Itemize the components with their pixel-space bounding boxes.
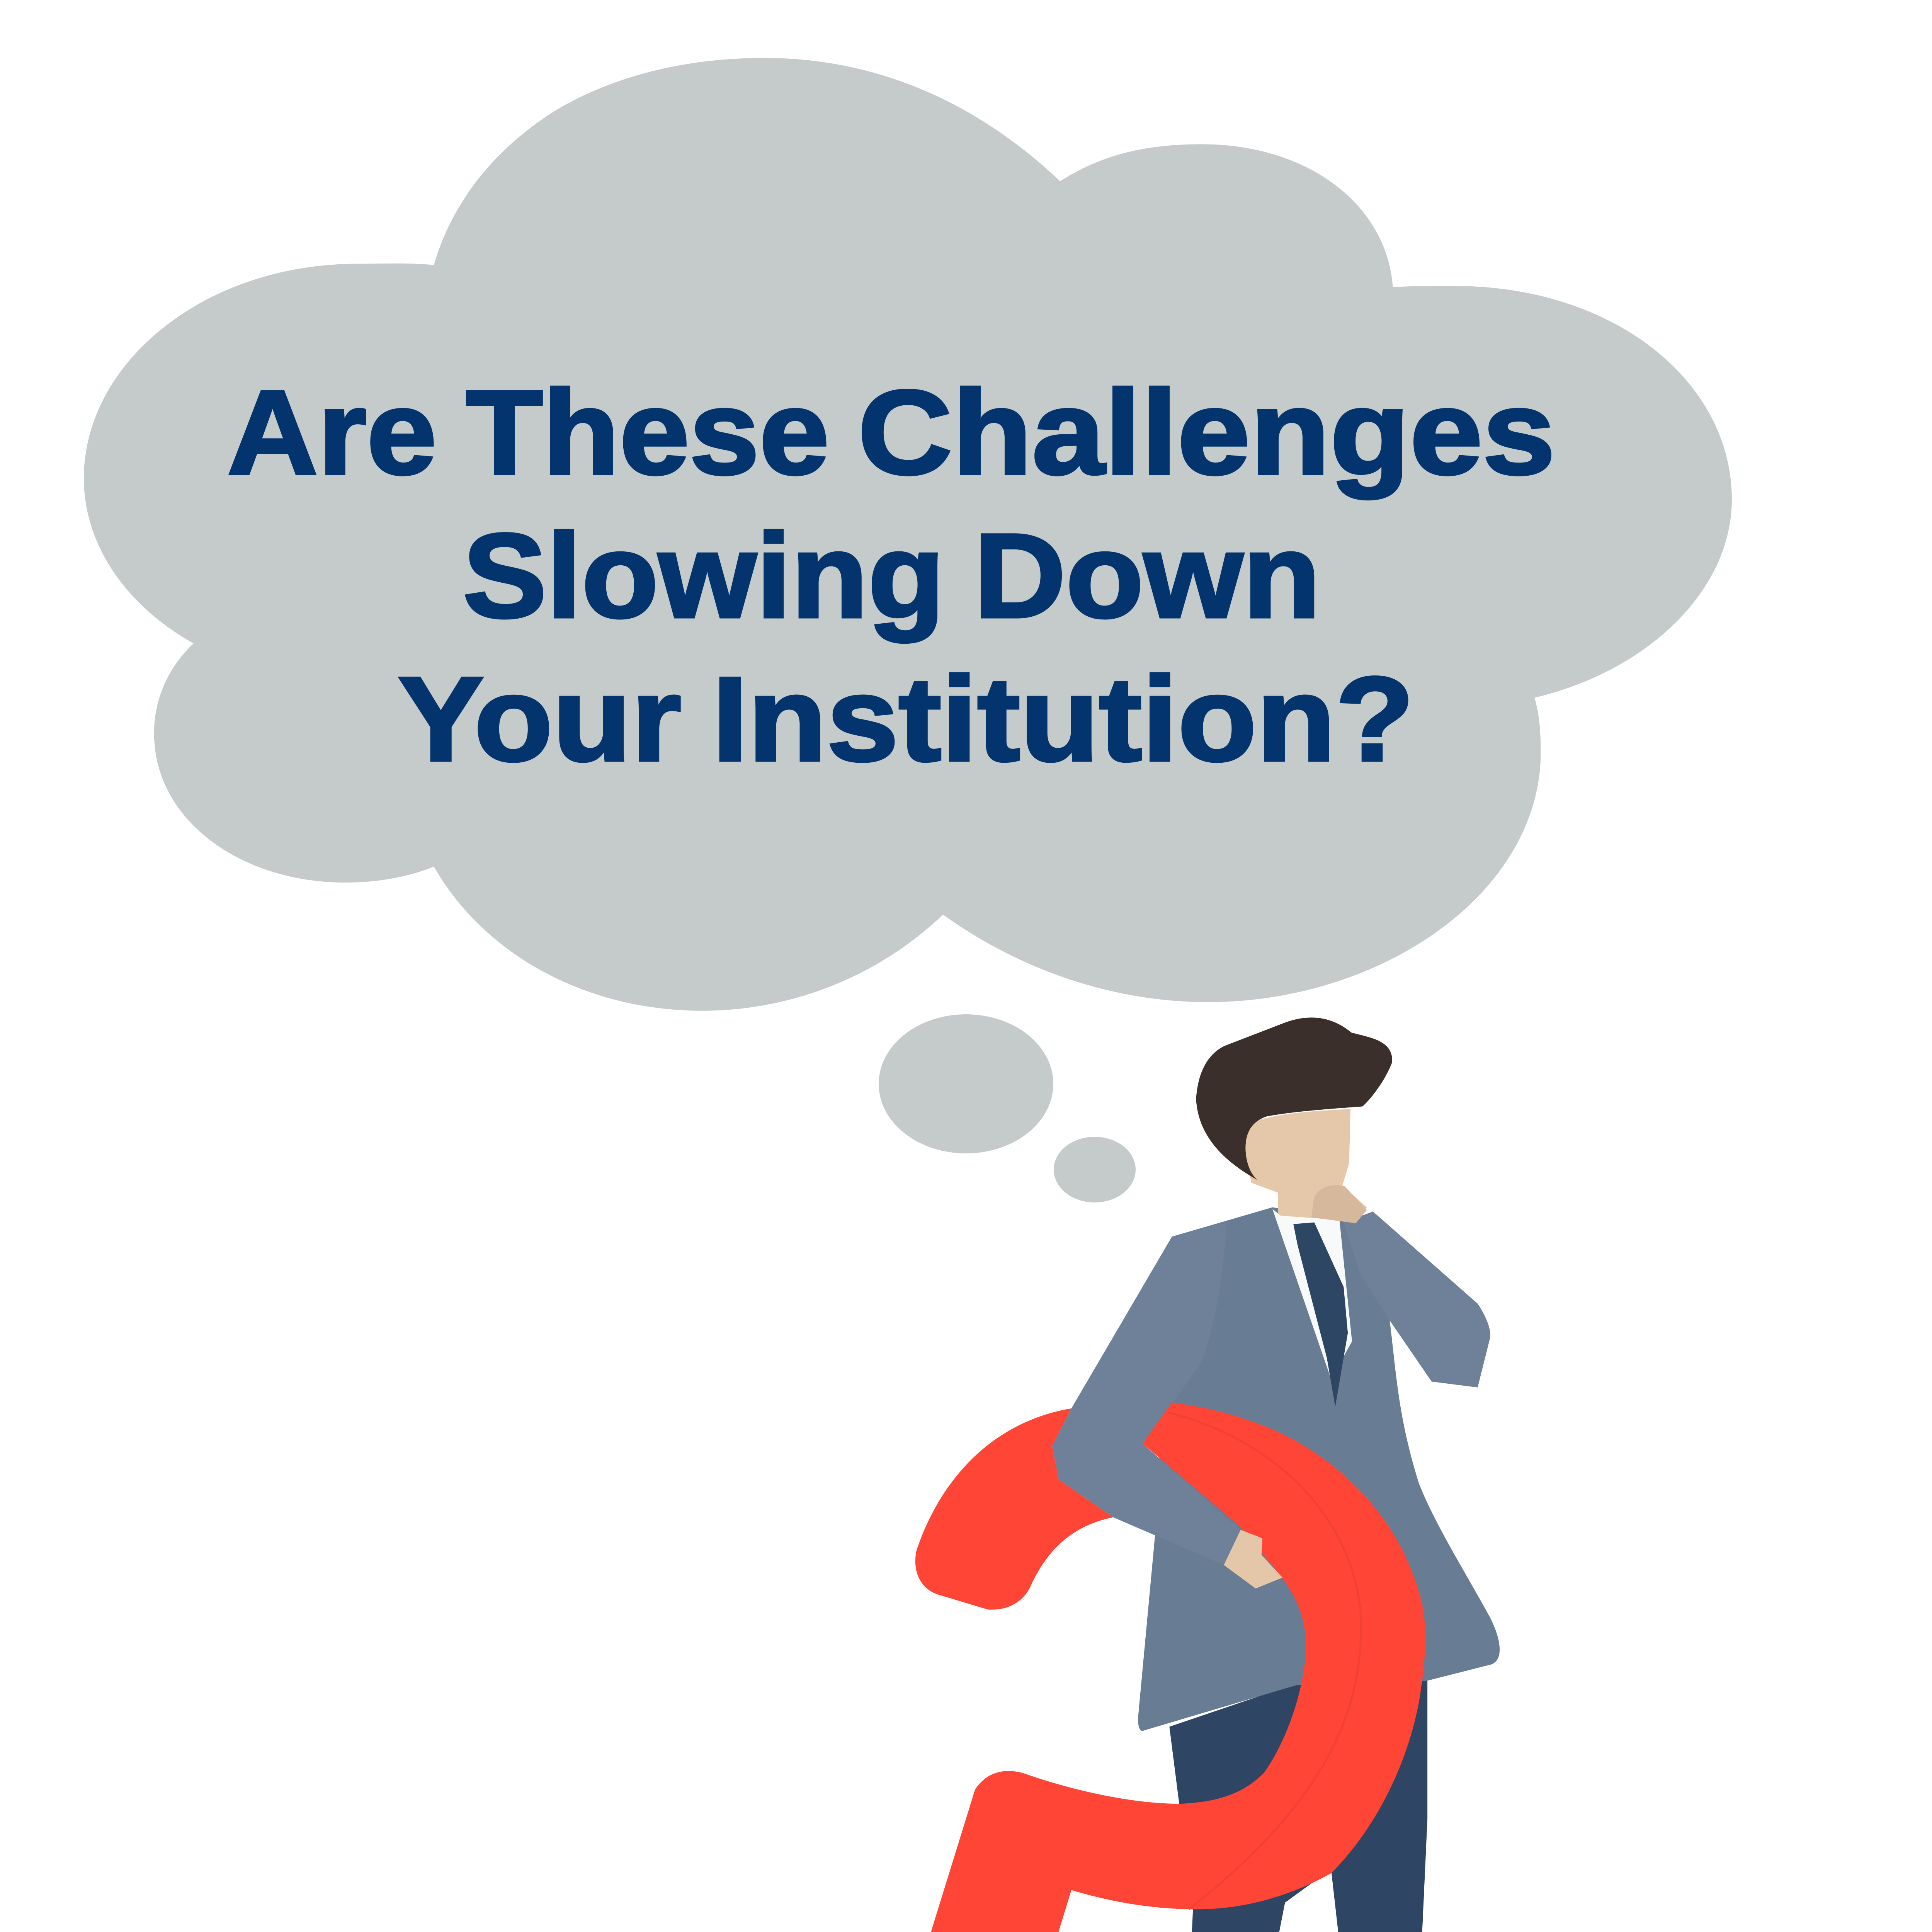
heading line 3: Your: [398, 652, 681, 786]
heading line 3: Institution?: [712, 652, 1414, 786]
tie: [1293, 1223, 1348, 1407]
thought bubble large: [879, 1014, 1053, 1153]
heading line 2: Down: [974, 509, 1321, 643]
thought bubble small: [1054, 1137, 1136, 1202]
heading line 3: [398, 652, 1414, 786]
neck and face: [1238, 1109, 1367, 1220]
man's head: [1196, 1017, 1392, 1220]
heading line 2: Slowing: [463, 509, 945, 643]
left arm around question mark: [1052, 1223, 1241, 1565]
shirt: [1272, 1209, 1352, 1379]
thought cloud: [84, 58, 1732, 1011]
question mark front: [920, 1403, 1425, 1932]
heading line 1: These: [466, 365, 829, 499]
hand at chin: [1311, 1185, 1367, 1223]
heading line 1: Challenges: [858, 365, 1555, 500]
jacket body: [1138, 1208, 1500, 1731]
man's trousers: [1169, 1680, 1427, 1932]
heading line 1: [227, 365, 1555, 500]
question mark shading line: [1168, 1413, 1361, 1909]
raised arm: [1344, 1211, 1490, 1388]
hand on hip: [1224, 1530, 1282, 1588]
heading line 2: [463, 509, 1321, 643]
question mark top behind arm: [915, 1408, 1113, 1610]
heading line 1: Are: [227, 365, 437, 499]
heading: [227, 365, 1555, 786]
hair: [1196, 1017, 1392, 1180]
